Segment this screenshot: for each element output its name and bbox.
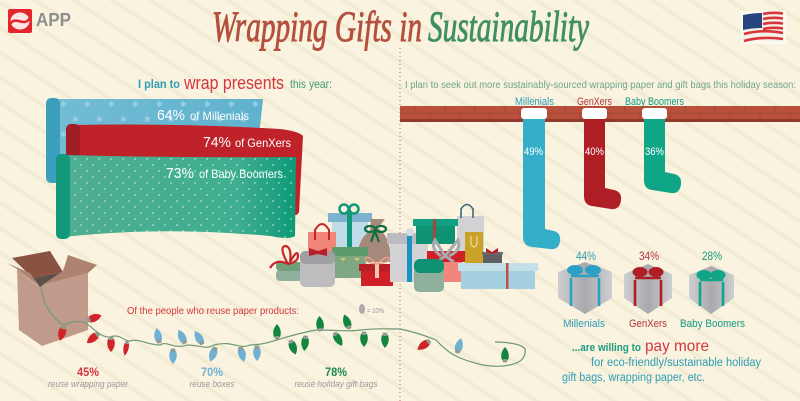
gift: green lid [413,219,458,244]
gift stat: Baby Boomers 28%: 28% [702,249,722,263]
bag: coral [308,224,336,256]
roll: Baby Boomers [56,154,296,239]
stocking: GenXers 40%: GenXers [577,96,612,108]
legend: bulb = 10%: = 10% [367,308,384,315]
bulbs: green 78% [273,313,509,362]
sack [358,219,390,262]
gift stat: GenXers 34%: GenXers [629,318,667,330]
title: Sustainability [428,4,590,51]
gift stat: Millennials 44%: 44% [576,249,596,263]
gift stat: Millennials 44% [558,249,612,330]
roll: GenXers: 74% [203,134,231,151]
gift: dark small [482,248,503,264]
heading: wrap presents: this year: [290,77,332,91]
bag: yellow [465,232,483,263]
string of lights [41,286,525,366]
stocking: GenXers 40% [577,96,621,209]
stat: 45% reuse wrapping paper: 45% [77,365,99,379]
gift: tall grey [387,228,432,282]
stocking: GenXers 40%: 40% [585,146,604,158]
gift: red [359,257,395,286]
stocking: Baby Boomers 36%: Baby Boomers [625,96,684,108]
legend: bulb = 10% [359,304,384,315]
stocking: Millennials 49% [515,96,560,249]
stat: 78% reuse holiday gift bags: reuse holiday gift bags [294,379,378,390]
tin: green [414,259,444,292]
illustration: pile of gifts [270,204,538,292]
text: willing to pay more: for eco-friendly/sustainable holiday [591,357,761,369]
stat: 45% reuse wrapping paper [48,365,129,390]
stocking: Baby Boomers 36%: 36% [645,146,664,158]
logo: APP [8,9,71,33]
gift stat: Baby Boomers 28%: Baby Boomers [680,318,745,330]
stat: 70% reuse boxes: reuse boxes [190,379,235,390]
icon: US flag [741,11,786,44]
gift: blue back [328,204,372,248]
roll: Baby Boomers: 73% [166,165,194,182]
roll: GenXers [66,124,303,215]
gift stat: GenXers 34% [624,249,672,330]
panel: wrapping paper rolls [46,98,303,239]
heading: wrap presents: wrap presents [183,73,284,93]
stocking: Baby Boomers 36% [625,96,684,193]
gift: coral with grey bow [427,240,466,282]
roll: Millennials [46,98,263,184]
mantel: brick wall [400,106,800,122]
roll: Baby Boomers: of Baby Boomers [199,167,283,181]
bag: green [332,247,368,278]
gift stat: GenXers 34%: 34% [639,249,659,263]
stat: 78% reuse holiday gift bags [294,365,378,390]
text: willing to pay more: gift bags, wrapping paper, etc. [562,372,705,384]
heading: wrap presents: I plan to [138,77,180,91]
logo: APP: APP [36,10,71,30]
bag: grey rear [457,204,484,252]
roll: Millennials: of Millenials [190,109,249,123]
illustration: cardboard box [7,251,97,346]
title: Wrapping Gifts in [212,4,422,51]
text: willing to pay more [562,338,761,384]
gift stat: Baby Boomers 28% [680,249,745,330]
text: willing to pay more: ...are willing to [572,342,641,354]
stocking: Millennials 49%: Millenials [515,96,554,108]
text: willing to pay more: pay more [645,338,709,355]
gift: small with red bow [270,246,302,281]
heading: reuse paper products: Of the people who reuse paper products: [127,305,299,317]
gift: light blue [458,263,538,289]
stat: 70% reuse boxes [190,365,235,390]
stat: 78% reuse holiday gift bags: 78% [325,365,347,379]
gift stat: Millennials 44%: Millenials [563,318,605,330]
roll: Millennials: 64% [157,107,185,124]
stocking: Millennials 49%: 49% [524,146,543,158]
roll: GenXers: of GenXers [235,136,291,150]
stat: 45% reuse wrapping paper: reuse wrapping paper [48,379,129,390]
heading: wrap presents [138,73,332,93]
bulbs: red 45% [56,312,432,356]
stat: 70% reuse boxes: 70% [201,365,223,379]
tin: grey [300,248,335,287]
bulbs: blue 70% [153,327,465,364]
